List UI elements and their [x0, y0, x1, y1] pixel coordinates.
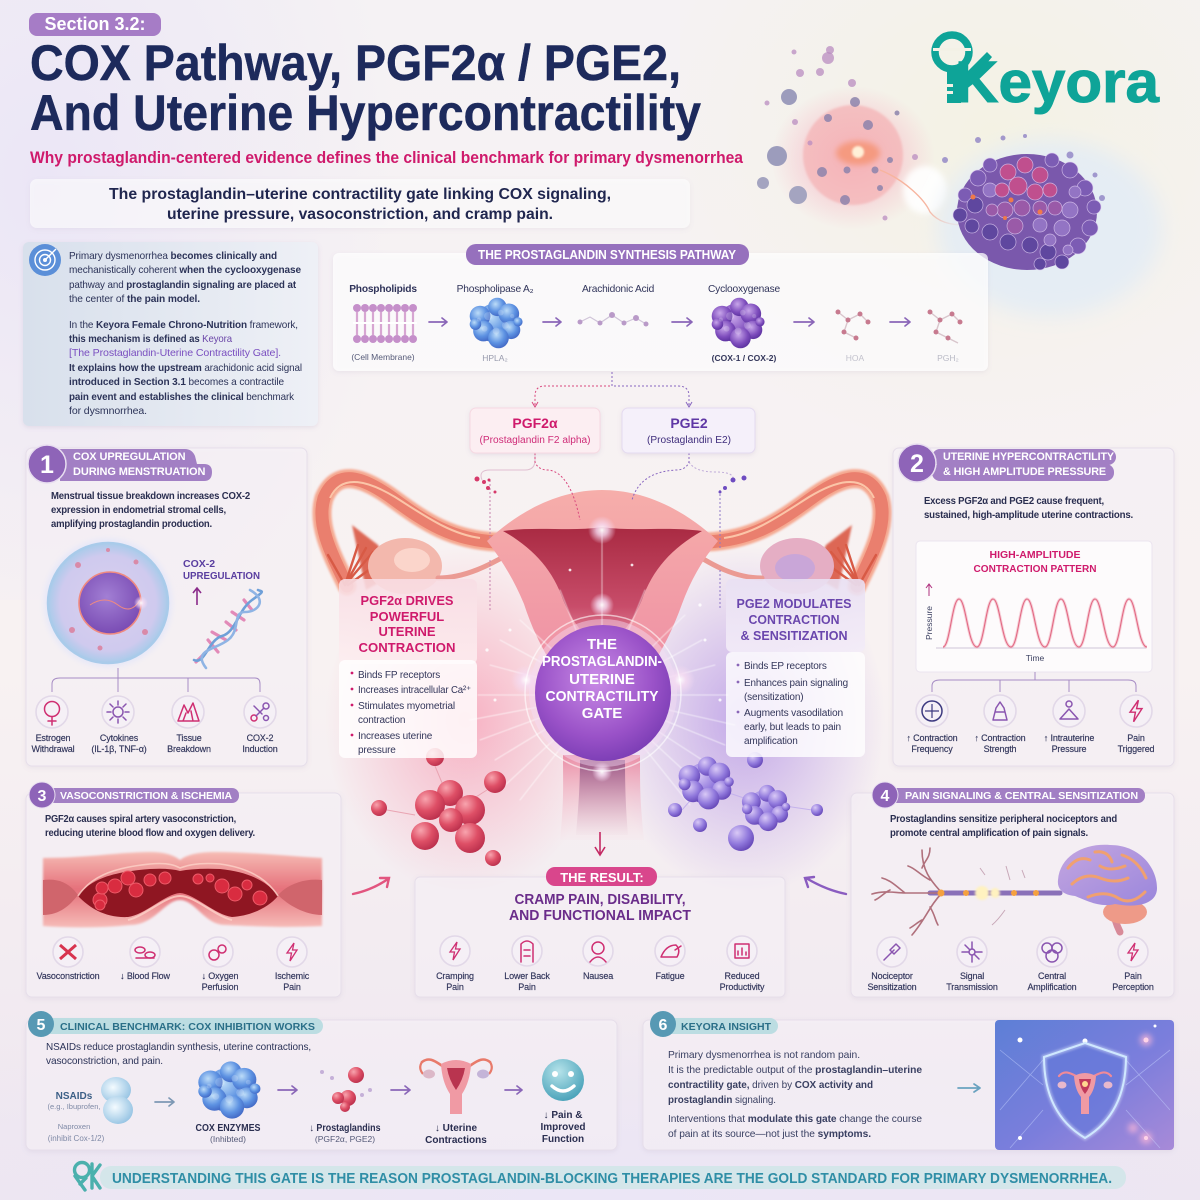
panel 2 description [924, 496, 1133, 521]
dashed receptor lines [481, 453, 733, 610]
step: NSAIDs: (e.g., Ibuprofen, [48, 1102, 100, 1111]
intro paragraph 2 [69, 320, 302, 417]
step: uterus: ↓ Uterine [435, 1123, 478, 1134]
bullets: (sensitization) [744, 692, 803, 703]
step: improved function [540, 1059, 586, 1145]
panel 3 header: VASOCONSTRICTION & ISCHEMIA [60, 790, 233, 802]
icon: signal transmission: Transmission [946, 982, 998, 992]
panel 3 description: PGF2α causes spiral artery vasoconstriction, [45, 814, 236, 825]
icon: pain triggered: Pain [1127, 733, 1145, 743]
bullets: early, but leads to pain [744, 722, 841, 733]
panel 2 header: & HIGH AMPLITUDE PRESSURE [943, 466, 1106, 478]
result pill: THE RESULT: [560, 870, 644, 885]
step: prostaglandins: ↓ Prostaglandins [310, 1123, 381, 1134]
PGE2 label box: PGE2 [670, 415, 708, 431]
lead statement box: The prostaglandin–uterine contractility gate linking COX signaling, [109, 186, 611, 203]
step: arachidonic acid: Arachidonic Acid [582, 284, 655, 295]
pathway heading pill: THE PROSTAGLANDIN SYNTHESIS PATHWAY [478, 248, 737, 262]
insight text [668, 1050, 922, 1140]
arrow [391, 1086, 410, 1094]
icon: central amplification: Central [1038, 971, 1066, 981]
icon: oxygen: Perfusion [202, 982, 238, 992]
image: shield with uterus [995, 1020, 1174, 1150]
chart: contraction pattern: CONTRACTION PATTERN [974, 563, 1096, 575]
illustration: cell [44, 539, 172, 667]
icon: cramping pain: Cramping [436, 971, 474, 981]
panel 1 header: 1 [40, 451, 54, 479]
arrow [672, 318, 692, 326]
step: HOA molecule [836, 310, 870, 363]
icon: ischemic pain [275, 937, 310, 992]
bullets: pressure [358, 745, 396, 756]
panel 1: COX upregulation [26, 445, 307, 766]
heading: UTERINE [378, 624, 436, 639]
PGE2 label box [622, 408, 755, 453]
icon: cramping pain: Pain [446, 982, 464, 992]
panel 2 header: UTERINE HYPERCONTRACTILITY [943, 451, 1115, 463]
panel 3 header [29, 782, 239, 808]
intro paragraph 2: It explains how the upstream arachidonic acid signal [69, 363, 302, 374]
panel 5 header: 5 [37, 1017, 46, 1034]
icon: contraction strength: ↑ Contraction [974, 733, 1026, 743]
panel 3 header: 3 [38, 788, 47, 805]
panel 6: Keyora insight [643, 1011, 1174, 1150]
panel 5 description: NSAIDs reduce prostaglandin synthesis, uterine contractions, [46, 1042, 311, 1053]
panel 4 header: 4 [881, 788, 890, 805]
icon: pain perception: Perception [1112, 982, 1154, 992]
logo: Keyora: Keyora [955, 50, 1160, 115]
panel 6 header: 6 [659, 1017, 668, 1034]
title [30, 35, 701, 141]
intro paragraph 2: [The Prostaglandin-Uterine Contractility Gate]. [69, 348, 281, 359]
panel: the result [415, 867, 785, 997]
step: PGH2 molecule [928, 310, 962, 363]
icon: COX-2 induction [242, 696, 278, 754]
icon: cramping pain [436, 936, 474, 992]
heading: POWERFUL [370, 609, 444, 624]
icon: signal transmission: Signal [960, 971, 984, 981]
icon: nociceptor sensitization: Sensitization [867, 982, 917, 992]
bullets [737, 661, 848, 747]
PGF2a label box: (Prostaglandin F2 alpha) [480, 435, 590, 446]
icon: contraction frequency: Frequency [911, 744, 953, 754]
arrow: gate down to result [595, 832, 605, 855]
left fallopian tube and ovary [322, 479, 512, 594]
central gate circle: CONTRACTILITY [546, 688, 658, 705]
PGE2 label box: (Prostaglandin E2) [647, 435, 731, 446]
result title: CRAMP PAIN, DISABILITY, [514, 892, 686, 908]
panel: PGF2a drives contraction [339, 579, 477, 758]
step: prostaglandins [310, 1067, 381, 1144]
intro paragraph 2: this mechanism is defined as Keyora [69, 334, 232, 345]
icon: blood flow: ↓ Blood Flow [120, 971, 171, 981]
step: phospholipase A2: HPLA₂ [482, 353, 508, 363]
bullets: Binds EP receptors [744, 661, 827, 672]
heading [358, 593, 456, 655]
heading: CONTRACTION [748, 612, 840, 627]
insight text: Interventions that modulate this gate change the course [668, 1114, 922, 1125]
icon: ischemic pain: Ischemic [275, 971, 310, 981]
arrow [429, 318, 447, 326]
insight text: of pain at its source—not just the symptoms. [668, 1129, 871, 1140]
icon: contraction frequency: ↑ Contraction [906, 733, 958, 743]
central gate circle [525, 615, 681, 771]
icon: estrogen: Withdrawal [31, 744, 75, 754]
decorative molecules: pink burst [757, 46, 965, 230]
decorative molecules: purple brain [938, 134, 1162, 316]
panel 5 header: CLINICAL BENCHMARK: COX INHIBITION WORKS [60, 1021, 315, 1033]
icon: pain triggered: Triggered [1118, 744, 1155, 754]
icon: ischemic pain: Pain [283, 982, 301, 992]
label: COX-2 upregulation [183, 558, 260, 605]
panel 3: vasoconstriction and ischemia [26, 782, 341, 997]
lead statement box: uterine pressure, vasoconstriction, and cramp pain. [167, 206, 553, 223]
icon: oxygen [202, 937, 239, 992]
step: improved function: ↓ Pain & [544, 1110, 582, 1121]
insight text: It is the predictable output of the prostaglandin–uterine [668, 1065, 922, 1076]
heading: & SENSITIZATION [740, 628, 848, 643]
panel 1 description [51, 491, 250, 530]
icon: tissue breakdown [167, 696, 211, 754]
footer logo mark [74, 1162, 100, 1190]
icon: target [29, 244, 61, 276]
icon: nociceptor sensitization [867, 937, 917, 992]
chart: contraction pattern: HIGH-AMPLITUDE [990, 549, 1080, 561]
step: prostaglandins: (PGF2α, PGE2) [315, 1134, 375, 1144]
icon: cytokines [91, 696, 147, 754]
step: PGH2 molecule: PGH₂ [937, 353, 959, 363]
icon: contraction strength [974, 695, 1026, 754]
illustration: constricted vessel [43, 852, 322, 927]
step: cyclooxygenase: (COX-1 / COX-2) [712, 353, 777, 363]
intro paragraph 2: for dysmnorrhea. [69, 406, 147, 417]
icon: cytokines: (IL-1β, TNF-α) [91, 744, 147, 754]
arrow [890, 318, 910, 326]
bullets: amplification [744, 736, 798, 747]
step: improved function: Improved [540, 1122, 586, 1133]
panel 2 header [898, 444, 1116, 482]
light rays [470, 530, 735, 805]
bullets [351, 670, 471, 756]
icon: contraction frequency [906, 695, 958, 754]
icon: intrauterine pressure [1044, 695, 1094, 754]
title: And Uterine Hypercontractility [30, 85, 701, 141]
lead statement box [30, 179, 690, 228]
icon: reduced productivity: Productivity [720, 982, 765, 992]
chart: contraction pattern: Time [1026, 653, 1045, 663]
bullets: Augments vasodilation [744, 708, 843, 719]
panel 4 header: PAIN SIGNALING & CENTRAL SENSITIZATION [905, 790, 1138, 802]
panel 2 description: Excess PGF2α and PGE2 cause frequent, [924, 496, 1104, 507]
insight text: contractility gate, driven by COX activity and [668, 1080, 873, 1091]
central gate circle: UTERINE [569, 671, 635, 688]
result title: AND FUNCTIONAL IMPACT [509, 908, 691, 924]
icon: pain triggered [1118, 695, 1155, 754]
icon: vasoconstriction: Vasoconstriction [37, 971, 100, 981]
intro paragraph 1: pathway and prostaglandin signaling are placed at [69, 280, 297, 291]
panel 3 description [45, 814, 255, 839]
panel 2: uterine hypercontractility [893, 444, 1174, 766]
arrow [794, 318, 814, 326]
arrow [505, 1086, 522, 1094]
step: NSAIDs: NSAIDs [56, 1091, 93, 1102]
icon: COX-2 induction: Induction [242, 744, 278, 754]
icon: fatigue [655, 936, 685, 981]
panel 4 header [872, 782, 1145, 808]
panel 1 header [28, 445, 212, 483]
panel 1 description: amplifying prostaglandin production. [51, 519, 212, 530]
panel: intro text [23, 242, 318, 426]
bullets: Stimulates myometrial [358, 701, 455, 712]
icon: pain perception: Pain [1124, 971, 1142, 981]
step: phospholipase A2: Phospholipase A₂ [457, 284, 534, 295]
heading: PGE2 MODULATES [736, 596, 852, 611]
bullets: Enhances pain signaling [744, 678, 848, 689]
panel 6 header [650, 1011, 778, 1037]
panel 5 header [28, 1011, 323, 1037]
chart: contraction pattern [916, 541, 1152, 672]
panel 4: pain signaling and central sensitization [851, 782, 1174, 997]
step: COX enzymes [196, 1061, 261, 1144]
intro paragraph 1: mechanistically coherent when the cyclooxygenase [69, 265, 301, 276]
step: phospholipase A2 [457, 284, 534, 363]
chart: contraction pattern: Pressure [924, 606, 934, 640]
right fallopian tube and ovary [692, 479, 882, 594]
result pill [546, 867, 657, 886]
illustration: neuron to brain [872, 845, 1157, 935]
title: COX Pathway, PGF2α / PGE2, [30, 35, 681, 91]
footer banner [100, 1166, 1126, 1189]
step: NSAIDs [48, 1077, 133, 1143]
intro paragraph 1: Primary dysmenorrhea becomes clinically and [69, 251, 277, 262]
connectors to icons [52, 668, 260, 692]
intro paragraph 1: the center of the pain model. [69, 294, 200, 305]
uterine cavity [503, 527, 702, 660]
panel 6 header: KEYORA INSIGHT [681, 1021, 772, 1033]
bullets: Increases uterine [358, 731, 433, 742]
panel 1 header: DURING MENSTRUATION [73, 466, 205, 478]
step: COX enzymes: (Inhibted) [210, 1134, 246, 1144]
bullets: Binds FP receptors [358, 670, 440, 681]
section tag: Section 3.2: [44, 14, 146, 34]
PGF2a label box: PGF2α [512, 415, 558, 431]
step: uterus: Contractions [425, 1135, 487, 1146]
panel 2 description: sustained, high-amplitude uterine contractions. [924, 510, 1133, 521]
insight text: Primary dysmenorrhea is not random pain. [668, 1050, 860, 1061]
intro paragraph 1 [69, 251, 301, 305]
icon: COX-2 induction: COX-2 [247, 733, 274, 743]
footer banner: UNDERSTANDING THIS GATE IS THE REASON PROSTAGLANDIN-BLOCKING THERAPIES ARE THE GOLD STANDARD FOR PRIMARY DYSMENORRHEA. [112, 1171, 1112, 1187]
panel 5 description: vasoconstriction, and pain. [46, 1056, 163, 1067]
icon: cytokines: Cytokines [100, 733, 139, 743]
panel 5: clinical benchmark [26, 1011, 617, 1150]
icon: oxygen: ↓ Oxygen [202, 971, 239, 981]
bullets: Increases intracellular Ca²⁺ [358, 685, 471, 696]
step: uterus [420, 1059, 492, 1146]
connectors to icons [932, 672, 1136, 692]
central gate circle: PROSTAGLANDIN- [542, 653, 662, 670]
icon: lower back pain [504, 936, 550, 992]
icon: lower back pain: Lower Back [504, 971, 550, 981]
connectors: pathway to PGF2a and PGE2 [532, 372, 692, 407]
arrow: pain signaling to result [805, 877, 846, 894]
panel 4 description [890, 814, 1117, 839]
result title [509, 892, 691, 924]
icon: central amplification: Amplification [1027, 982, 1077, 992]
intro paragraph 2: In the Keyora Female Chrono-Nutrition framework, [69, 320, 298, 331]
panel 4 description: promote central amplification of pain signals. [890, 828, 1088, 839]
icon: nausea [583, 936, 613, 981]
arrow: ischemia to result [353, 878, 389, 894]
step: improved function: Function [542, 1134, 584, 1145]
icon: signal transmission [946, 937, 998, 992]
central uterus illustration [322, 453, 885, 895]
icon: estrogen [31, 696, 75, 754]
label: COX-2 upregulation: COX-2 [183, 558, 215, 570]
step: NSAIDs: (inhibit Cox-1/2) [48, 1134, 105, 1143]
arrow [278, 1086, 297, 1094]
intro paragraph 2: pain event and establishes the clinical benchmark [69, 392, 295, 403]
step: arachidonic acid [578, 284, 655, 326]
icon: reduced productivity [720, 936, 765, 992]
icon: nociceptor sensitization: Nociceptor [871, 971, 913, 981]
icon: contraction strength: Strength [984, 744, 1017, 754]
panel 1 description: expression in endometrial stromal cells, [51, 505, 226, 516]
icon: vasoconstriction [37, 937, 100, 981]
step: NSAIDs: Naproxen [58, 1122, 90, 1131]
icon: tissue breakdown: Tissue [176, 733, 202, 743]
icon: pain perception [1112, 937, 1154, 992]
central gate circle: THE [587, 636, 617, 653]
panel 1 description: Menstrual tissue breakdown increases COX-2 [51, 491, 250, 502]
step: phospholipids: (Cell Membrane) [351, 352, 415, 362]
icon: intrauterine pressure: ↑ Intrauterine [1044, 733, 1094, 743]
arrow [958, 1084, 980, 1092]
icon: lower back pain: Pain [518, 982, 536, 992]
panel: PGE2 modulates contraction [726, 579, 865, 757]
panel 1 header: COX UPREGULATION [73, 451, 186, 463]
heading: CONTRACTION [358, 640, 456, 655]
arrow [543, 318, 561, 326]
section tag [29, 13, 161, 36]
icon: intrauterine pressure: Pressure [1052, 744, 1087, 754]
panel 4 description: Prostaglandins sensitize peripheral nociceptors and [890, 814, 1117, 825]
arrow [155, 1098, 174, 1106]
step: cyclooxygenase [708, 284, 781, 363]
icon: central amplification [1027, 937, 1077, 992]
step: cyclooxygenase: Cyclooxygenase [708, 284, 781, 295]
step: COX enzymes: COX ENZYMES [196, 1123, 261, 1134]
step: phospholipids [349, 284, 417, 362]
central gate circle: GATE [582, 705, 622, 722]
step: HOA molecule: HOA [846, 353, 865, 363]
icon: nausea: Nausea [583, 971, 613, 981]
molecule cluster: PGF2a red spheres [371, 748, 506, 866]
illustration: DNA helix [194, 590, 262, 668]
intro paragraph 2: introduced in Section 3.1 becomes a contractile [69, 377, 284, 388]
heading [736, 596, 852, 643]
panel 5 description [46, 1042, 311, 1067]
bullets: contraction [358, 715, 405, 726]
subtitle: Why prostaglandin-centered evidence defines the clinical benchmark for primary dysmenorrhea [30, 149, 744, 167]
icon: estrogen: Estrogen [36, 733, 71, 743]
icon: fatigue: Fatigue [656, 971, 685, 981]
panel: prostaglandin synthesis pathway [333, 244, 988, 371]
icon: blood flow [120, 937, 171, 981]
heading: PGF2α DRIVES [360, 593, 454, 608]
cervix [560, 755, 644, 840]
molecule cluster: PGE2 purple spheres [668, 752, 823, 851]
panel 3 description: reducing uterine blood flow and oxygen delivery. [45, 828, 255, 839]
pathway heading pill [466, 244, 749, 265]
uterus body [487, 490, 718, 685]
icon: reduced productivity: Reduced [725, 971, 760, 981]
step: phospholipids: Phospholipids [349, 284, 417, 295]
panel 2 header: 2 [910, 450, 924, 478]
icon: tissue breakdown: Breakdown [167, 744, 211, 754]
label: COX-2 upregulation: UPREGULATION [183, 570, 260, 582]
PGF2a label box [470, 408, 600, 453]
insight text: prostaglandin signaling. [668, 1095, 776, 1106]
